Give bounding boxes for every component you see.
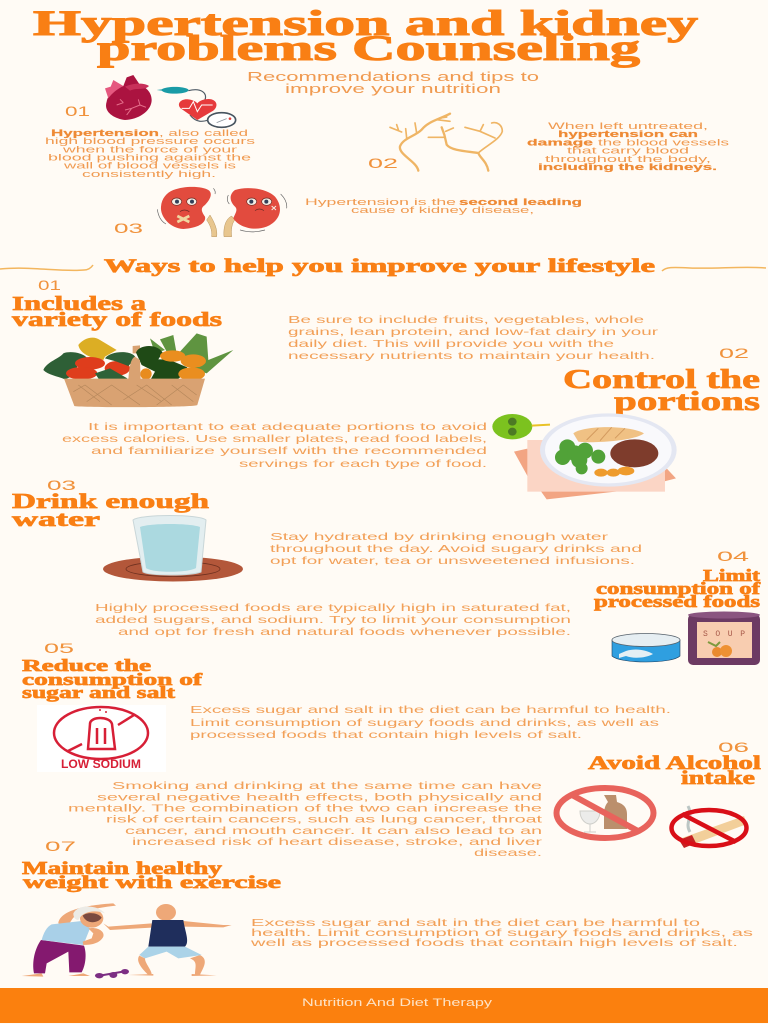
heading: includes a variety of foods: Includes a bbox=[12, 293, 146, 315]
title: problems Counseling bbox=[97, 28, 640, 68]
number: tip 04: 04 bbox=[717, 548, 749, 564]
text: second leading cause: cause of kidney disease, bbox=[351, 205, 534, 216]
text: hypertension damage: that carry blood bbox=[567, 146, 689, 156]
icon: vegetable basket bbox=[43, 333, 233, 407]
text: smoking and drinking: increased risk of heart disease, stroke, and liver bbox=[132, 836, 543, 848]
heading: maintain healthy weight bbox=[22, 858, 281, 892]
text: control portions: excess calories. Use smaller plates, read food labels, bbox=[62, 433, 487, 445]
text: hypertension damage: When left untreated, bbox=[548, 121, 708, 132]
icon: heart bbox=[105, 75, 152, 120]
number: tip 07: 07 bbox=[45, 838, 76, 854]
icon: sad kidneys bbox=[157, 187, 287, 237]
heading: avoid alcohol intake: intake bbox=[681, 768, 755, 789]
illustration: people exercising bbox=[22, 903, 232, 978]
text: smoking and drinking: Smoking and drinking at the same time can have bbox=[112, 780, 542, 792]
text: hypertension definition: Hypertension bbox=[51, 128, 159, 139]
heading: reduce sugar and salt bbox=[22, 656, 203, 702]
icon: water glass on saucer bbox=[103, 516, 243, 582]
text: smoking and drinking: several negative health effects, both physically and bbox=[97, 792, 542, 804]
heading: drink enough water: Drink enough bbox=[12, 489, 209, 513]
heading: limit consumption of processed foods bbox=[594, 566, 761, 611]
text: hypertension definition bbox=[45, 128, 255, 180]
footer bar: Nutrition And Diet Therapy bbox=[302, 997, 493, 1009]
text: sugar and salt: Limit consumption of sugary foods and drinks, as well as bbox=[190, 717, 659, 729]
text: variety of foods: daily diet. This will provide you with the bbox=[288, 338, 614, 350]
heading: control the portions: Control the bbox=[563, 364, 760, 394]
section heading with flourishes bbox=[0, 257, 766, 277]
heading: maintain healthy weight: Maintain healthy bbox=[22, 858, 222, 878]
title: Hypertension and kidney bbox=[33, 3, 698, 43]
heading: reduce sugar and salt: sugar and salt bbox=[22, 683, 176, 702]
icon: low sodium badge bbox=[37, 705, 166, 772]
heading: includes a variety of foods bbox=[12, 293, 222, 331]
text: hypertension damage: including the kidneys. bbox=[538, 162, 717, 173]
text: drink water: opt for water, tea or unsweetened infusions. bbox=[270, 555, 635, 567]
number 02: 02 bbox=[368, 155, 398, 171]
icon: no smoking sign bbox=[672, 806, 747, 848]
text: hypertension definition: high blood pressure occurs bbox=[45, 136, 255, 147]
icon: healthy plate bbox=[492, 413, 677, 499]
text: hypertension definition: , also called bbox=[159, 128, 248, 139]
text: hypertension definition: wall of blood vessels is bbox=[62, 160, 236, 172]
text: maintain weight: health. Limit consumption of sugary foods and drinks, as bbox=[251, 927, 753, 939]
text: control portions: servings for each type of food. bbox=[239, 458, 487, 470]
text: drink water: Stay hydrated by drinking enough water bbox=[270, 531, 609, 543]
text: hypertension damage: hypertension can bbox=[558, 129, 698, 140]
text: maintain weight: Excess sugar and salt in the diet can be harmful to bbox=[251, 917, 700, 929]
text: second leading cause: Hypertension is the bbox=[305, 197, 456, 208]
text: hypertension damage: throughout the body, bbox=[545, 154, 711, 165]
text: hypertension damage: the blood vessels bbox=[598, 138, 729, 148]
text: sugar and salt: processed foods that contain high levels of salt. bbox=[190, 729, 582, 741]
text: second leading cause: second leading bbox=[459, 197, 582, 208]
text: limit processed foods: and opt for fresh and natural foods whenever possible. bbox=[118, 626, 571, 638]
heading: control the portions: portions bbox=[614, 386, 760, 416]
heading: maintain healthy weight: weight with exercise bbox=[23, 872, 281, 892]
text: smoking and drinking: mentally. The combination of the two can increase the bbox=[68, 802, 542, 814]
text: drink water bbox=[270, 531, 642, 567]
section heading with flourishes: Ways to help you improve your lifestyle bbox=[104, 257, 655, 277]
heading: drink enough water bbox=[12, 489, 209, 531]
heading: includes a variety of foods: variety of foods bbox=[12, 309, 222, 331]
text: variety of foods: Be sure to include fruits, vegetables, whole bbox=[288, 314, 644, 326]
title bbox=[33, 3, 698, 68]
text: drink water: throughout the day. Avoid sugary drinks and bbox=[270, 543, 642, 555]
text: control portions bbox=[62, 421, 487, 470]
icon: no alcohol sign bbox=[556, 788, 654, 838]
number: tip 06: 06 bbox=[718, 739, 749, 755]
text: smoking and drinking: cancer, and mouth cancer. It can also lead to an bbox=[125, 825, 542, 837]
text: variety of foods bbox=[288, 314, 659, 362]
heading: limit consumption of processed foods: consumption of bbox=[596, 579, 760, 598]
icon: canned fish and soup bbox=[612, 612, 760, 665]
footer bar bbox=[0, 988, 768, 1023]
number: tip 02: 02 bbox=[719, 345, 749, 361]
heading: avoid alcohol intake: Avoid Alcohol bbox=[588, 753, 761, 774]
text: variety of foods: necessary nutrients to maintain your health. bbox=[288, 350, 655, 362]
number 01: 01 bbox=[65, 103, 90, 119]
icon: low sodium badge: LOW SODIUM bbox=[61, 757, 141, 771]
text: limit processed foods bbox=[95, 602, 571, 638]
subtitle: improve your nutrition bbox=[285, 82, 501, 96]
subtitle bbox=[247, 70, 539, 96]
text: limit processed foods: Highly processed foods are typically high in saturated fat, bbox=[95, 602, 571, 614]
icon: canned fish and soup: SOUP bbox=[703, 630, 745, 639]
text: second leading cause bbox=[305, 197, 582, 216]
text: hypertension damage bbox=[527, 121, 729, 173]
text: sugar and salt bbox=[190, 704, 671, 741]
icon: blood pressure monitor bbox=[157, 87, 236, 127]
text: variety of foods: grains, lean protein, and low-fat dairy in your bbox=[288, 326, 659, 338]
text: limit processed foods: added sugars, and sodium. Try to limit your consumption bbox=[95, 614, 571, 626]
heading: avoid alcohol intake bbox=[588, 753, 761, 789]
subtitle: Recommendations and tips to bbox=[247, 70, 539, 84]
heading: limit consumption of processed foods: Limit bbox=[703, 566, 760, 585]
text: maintain weight: well as processed foods that contain high levels of salt. bbox=[249, 937, 738, 949]
heading: reduce sugar and salt: Reduce the bbox=[22, 656, 152, 675]
heading: drink enough water: water bbox=[12, 507, 100, 531]
text: smoking and drinking: risk of certain cancers, such as lung cancer, throat bbox=[106, 814, 542, 826]
text: sugar and salt: Excess sugar and salt in the diet can be harmful to health. bbox=[190, 704, 671, 716]
text: maintain weight bbox=[249, 917, 753, 949]
text: smoking and drinking bbox=[68, 780, 543, 859]
number: tip 05: 05 bbox=[44, 640, 74, 656]
text: hypertension damage: damage bbox=[527, 138, 593, 148]
number: tip 03: 03 bbox=[47, 477, 76, 493]
text: hypertension definition: when the force of your bbox=[61, 144, 237, 156]
text: control portions: and familiarize yourself with the recommended bbox=[91, 445, 487, 457]
heading: limit consumption of processed foods: processed foods bbox=[594, 592, 761, 611]
number: tip 01: 01 bbox=[38, 277, 61, 293]
number 03: 03 bbox=[114, 220, 143, 236]
icon: blood vessels bbox=[390, 114, 502, 171]
heading: control the portions bbox=[563, 364, 760, 416]
text: hypertension definition: blood pushing against the bbox=[48, 152, 251, 164]
text: hypertension definition: consistently high. bbox=[82, 169, 216, 180]
heading: reduce sugar and salt: consumption of bbox=[22, 670, 203, 689]
text: smoking and drinking: disease. bbox=[474, 847, 542, 859]
text: control portions: It is important to eat adequate portions to avoid bbox=[88, 421, 487, 433]
